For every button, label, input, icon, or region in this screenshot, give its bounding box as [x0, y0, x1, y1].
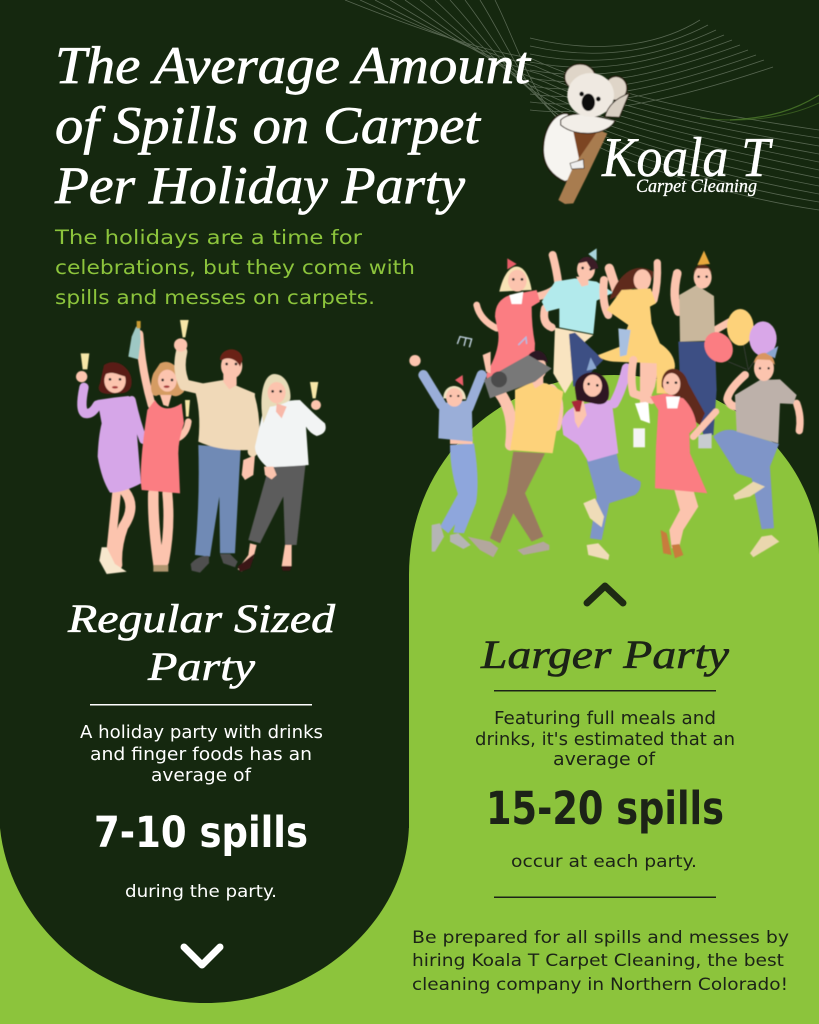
person: man in cyan shirt [542, 248, 617, 393]
text: regular party description: and finger foods has an [90, 744, 312, 765]
text: call to action: cleaning company in Northern Colorado! [412, 975, 788, 995]
balloons [699, 309, 777, 370]
text: larger party description: drinks, it's estimated that an [475, 729, 735, 750]
text: during the party: during the party. [125, 882, 277, 902]
panel: green bottom-left corner [0, 828, 409, 1024]
title: of Spills on Carpet [55, 97, 481, 155]
illustration: larger party group dancing [409, 248, 800, 560]
intro text [54, 226, 415, 309]
panel: dark regular party background [0, 810, 409, 1003]
illustration: regular party group of four [76, 320, 326, 574]
heading: Larger Party: Larger Party [480, 632, 729, 677]
person: woman in coral dress and collar [632, 360, 716, 558]
text: larger party description: Featuring full meals and [494, 708, 716, 729]
heading: Regular Sized Party: Party [147, 644, 255, 689]
intro text: celebrations, but they come with [55, 256, 415, 279]
logo wordmark: Koala T [601, 127, 774, 189]
stat: 7-10 spills: 7-10 spills [94, 808, 308, 858]
text: call to action [412, 928, 789, 995]
person: woman in blue top [409, 352, 491, 552]
person: woman in coral dress with bottle [128, 321, 190, 572]
text: larger party description [475, 708, 735, 770]
intro text: The holidays are a time for [54, 226, 363, 249]
heading: Regular Sized Party [67, 596, 336, 689]
icon: small music note [518, 337, 527, 345]
text: regular party description: average of [151, 765, 252, 786]
title [54, 37, 531, 215]
heading: Regular Sized Party: Regular Sized [67, 596, 336, 641]
person: woman in lilac sweater [562, 357, 641, 560]
icon: up chevron [587, 586, 623, 603]
text: occur at each party: occur at each party. [511, 852, 697, 872]
person: man in cream sweater [174, 320, 255, 573]
person: woman in lilac dress [76, 353, 143, 574]
person: man in yellow tee with boombox [468, 351, 563, 557]
text: call to action: hiring Koala T Carpet Cleaning, the best [412, 951, 784, 971]
person: woman in white blouse [238, 374, 326, 572]
person: man in khaki shirt [675, 251, 730, 448]
person: woman in yellow dress [598, 263, 675, 447]
logo tagline: Carpet Cleaning [636, 176, 757, 197]
text: larger party description: average of [553, 749, 656, 770]
text: call to action: Be prepared for all spills and messes by [412, 928, 789, 948]
person: blonde woman in coral dress [477, 255, 558, 445]
intro text: spills and messes on carpets. [55, 286, 375, 309]
title: Per Holiday Party [54, 157, 465, 215]
title: The Average Amount [55, 37, 531, 95]
icon: koala on branch [543, 64, 629, 204]
panel: green larger party background [409, 375, 819, 1024]
logo: Koala T Carpet Cleaning [543, 64, 774, 204]
icon: down chevron [184, 947, 220, 965]
text: regular party description: A holiday party with drinks [80, 722, 323, 743]
stat: 15-20 spills: 15-20 spills [486, 782, 724, 835]
icon: music notes [457, 337, 472, 347]
person: man in gray tee [713, 346, 800, 557]
text: regular party description [80, 722, 323, 786]
